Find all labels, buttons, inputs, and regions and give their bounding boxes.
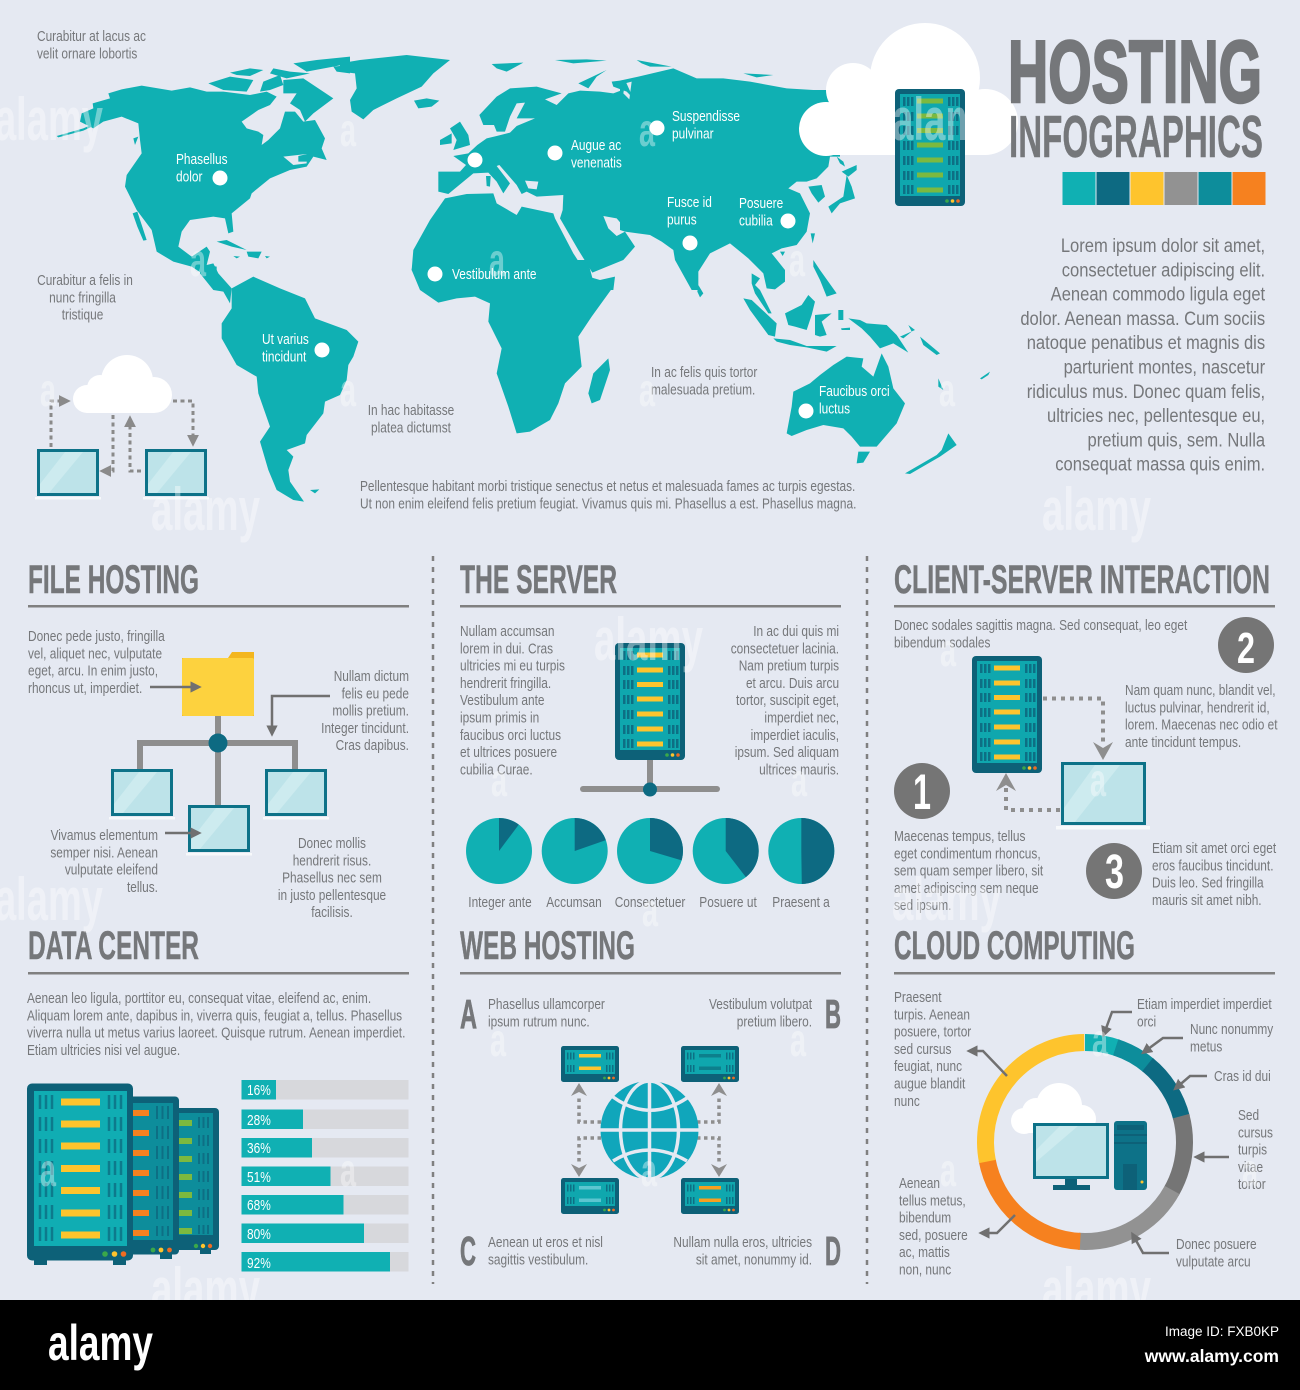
text: step 3: Duis leo. Sed fringilla: [1152, 874, 1264, 891]
text: lower right note: hendrerit risus.: [293, 852, 371, 869]
intro paragraph: parturient montes, nascetur: [1064, 356, 1265, 378]
panel: file hosting: [28, 558, 409, 920]
intro paragraph: pretium quis, sem. Nulla: [1088, 429, 1266, 451]
watermarks: alamy: [1042, 476, 1151, 543]
watermarks: alamy: [151, 1256, 260, 1323]
icon: monitor: [1034, 1124, 1108, 1190]
watermarks: a: [791, 754, 807, 806]
text: server right: ultrices mauris.: [759, 761, 839, 778]
donut chart: [986, 1042, 1184, 1242]
text: top left note: velit ornare lobortis: [37, 45, 138, 62]
watermarks: alamy: [151, 476, 260, 543]
text: lower left note: vulputate eleifend: [65, 861, 158, 878]
text: right note: Nullam dictum: [334, 668, 409, 684]
pie labels: Accumsan: [546, 894, 602, 910]
text: server left: hendrerit fringilla.: [460, 675, 551, 691]
text: step 1: sed ipsum.: [894, 897, 951, 913]
text: map caption: Pellentesque habitant morbi tristique senectus et netus et malesuada fames ac turpis egestas.: [360, 478, 855, 494]
footer logo: alamy: [48, 1315, 153, 1371]
text: data center paragraph: viverra nulla ut metus varius laoreet. Quisque rutrum. Aenean imperdiet.: [27, 1024, 405, 1041]
text: indian ocean note: In ac felis quis tortor: [651, 364, 757, 380]
watermarks: a: [1242, 1144, 1258, 1196]
callout arrows: [970, 1012, 1229, 1253]
text: lower left note: tellus.: [127, 879, 158, 895]
text: step 2: luctus pulvinar, hendrerit id,: [1125, 699, 1270, 716]
callout labels: orci: [1137, 1013, 1156, 1030]
bar chart: 92%: [247, 1255, 271, 1271]
callout labels: [894, 989, 1274, 1278]
text: atlantic note: In hac habitasse: [368, 402, 454, 418]
text: server right: imperdiet iaculis,: [751, 727, 839, 743]
icon: front server rack: [27, 1084, 133, 1265]
icon: small servers: [561, 1046, 739, 1214]
text: server left: Vestibulum ante: [460, 692, 545, 708]
bar chart: [242, 1080, 408, 1272]
text: step 2: ante tincidunt tempus.: [1125, 734, 1241, 750]
text: indian ocean note: malesuada pretium.: [651, 381, 755, 398]
pie labels: Integer ante: [468, 894, 532, 910]
text: left note: Curabitur a felis in: [37, 272, 133, 288]
heading: FILE HOSTING: [28, 558, 199, 602]
text: server left: et ultrices posuere: [460, 744, 557, 760]
icon: middle server rack: [120, 1096, 179, 1259]
heading: WEB HOSTING: [460, 924, 635, 968]
text: lower right note: facilisis.: [311, 904, 353, 920]
text: step 2: lorem. Maecenas nec odio et: [1125, 716, 1278, 733]
callout labels: augue blandit: [894, 1075, 966, 1092]
callout labels: non, nunc: [899, 1261, 952, 1278]
world map: [57, 55, 990, 502]
text: step 3: mauris sit amet nibh.: [1152, 892, 1262, 908]
callout labels: nunc: [894, 1093, 920, 1109]
callout labels: metus: [1190, 1038, 1223, 1055]
text: step 1: Maecenas tempus, tellus: [894, 828, 1026, 844]
text: right note: Integer tincidunt.: [321, 720, 409, 736]
map location markers: [212, 120, 814, 418]
panel: the server: [460, 558, 839, 910]
text: data center paragraph: Aliquam lorem ante, dapibus in, viverra quis, feugiat a, tellus. Phasellus: [27, 1007, 402, 1024]
watermarks: a: [642, 884, 658, 936]
icon: computer tower: [1114, 1121, 1147, 1190]
callout labels: cursus: [1238, 1124, 1273, 1141]
text: server left: lorem in dui. Cras: [460, 640, 553, 657]
callout labels: Aenean: [899, 1175, 940, 1191]
watermarks: a: [940, 624, 956, 676]
badge: 2: 2: [1237, 624, 1255, 673]
intro paragraph: ridiculus mus. Donec quam felis,: [1027, 381, 1265, 402]
callout labels: Cras id dui: [1214, 1068, 1271, 1084]
text: D: sit amet, nonummy id.: [696, 1251, 812, 1268]
icon: laptop: [1056, 764, 1150, 830]
map labels: Vestibulum ante: [452, 266, 537, 282]
callout labels: Donec posuere: [1176, 1236, 1257, 1252]
letters: A: [460, 991, 477, 1037]
watermarks: a: [490, 1014, 506, 1066]
bar chart: 16%: [247, 1082, 271, 1098]
arrows: [150, 687, 330, 833]
pie labels: Praesent a: [772, 894, 830, 910]
icon: large cloud with server: [799, 23, 1018, 206]
icon: network node: [208, 734, 228, 752]
bar chart: 68%: [247, 1197, 271, 1213]
watermarks: a: [939, 364, 955, 416]
text: server left: ipsum primis in: [460, 709, 539, 726]
text: step 1: eget condimentum rhoncus,: [894, 845, 1041, 862]
footer image id: Image ID: FXB0KP: [1165, 1324, 1279, 1339]
panel: web hosting: [460, 924, 841, 1274]
map labels: Ut varius: [262, 331, 309, 347]
watermarks: a: [940, 1144, 956, 1196]
intro paragraph: Aenean commodo ligula eget: [1051, 283, 1265, 305]
bar chart: 51%: [247, 1169, 271, 1185]
dotted arrows: [996, 698, 1113, 810]
watermarks: a: [340, 104, 356, 156]
text: server left: faucibus orci luctus: [460, 727, 561, 743]
map labels: tincidunt: [262, 348, 307, 365]
heading: THE SERVER: [460, 558, 617, 602]
text: server left: Nullam accumsan: [460, 623, 554, 639]
text: lower right note: Donec mollis: [298, 835, 366, 851]
watermarks: alamy: [594, 606, 703, 673]
intro paragraph: ultricies nec, pellentesque eu,: [1047, 405, 1265, 426]
intro paragraph: natoque penatibus et magnis dis: [1027, 332, 1265, 354]
map labels: Posuere: [739, 195, 783, 211]
dotted arrows: [571, 1083, 727, 1177]
map labels: pulvinar: [672, 125, 714, 142]
badge: 1: [894, 763, 950, 820]
watermarks: a: [789, 234, 805, 286]
footer url: www.alamy.com: [1144, 1346, 1279, 1366]
watermarks: a: [1090, 754, 1106, 806]
watermarks: a: [790, 1014, 806, 1066]
text: map caption: Ut non enim eleifend felis pretium feugiat. Vivamus quis mi. Phasellus a est. Phasellus magna.: [360, 495, 856, 512]
text: C: Aenean ut eros et nisl: [488, 1234, 603, 1250]
panel: cloud computing: [894, 924, 1274, 1278]
intro paragraph: dolor. Aenean massa. Cum sociis: [1020, 308, 1265, 329]
text: file hosting intro: Donec pede justo, fringilla: [28, 628, 165, 644]
badge: 3: [1086, 843, 1142, 899]
icon: folder: [182, 652, 254, 716]
text: server right: imperdiet nec,: [764, 709, 839, 726]
bar chart: 36%: [247, 1140, 271, 1156]
text: step 3: eros faucibus tincidunt.: [1152, 857, 1274, 874]
watermarks: a: [340, 364, 356, 416]
badge: 3: 3: [1105, 846, 1124, 899]
text: server right: et arcu. Duis arcu: [746, 675, 839, 691]
text: B: pretium libero.: [737, 1013, 812, 1030]
text: right note: mollis pretium.: [332, 702, 409, 719]
text: lower right note: in justo pellentesque: [278, 887, 386, 903]
text: lower left note: semper nisi. Aenean: [50, 844, 158, 861]
footer bar: [0, 1300, 1300, 1390]
text: B: Vestibulum volutpat: [709, 996, 812, 1012]
map labels: Suspendisse: [672, 108, 740, 124]
watermarks: a: [639, 364, 655, 416]
callout labels: turpis: [1238, 1141, 1267, 1158]
text: atlantic note: platea dictumst: [371, 419, 451, 436]
text: A: ipsum rutrum nunc.: [488, 1013, 590, 1030]
icon: server: [972, 656, 1042, 773]
map labels: venenatis: [571, 154, 622, 171]
text: step 2: Nam quam nunc, blandit vel,: [1125, 682, 1276, 698]
watermarks: a: [641, 1144, 657, 1196]
text: step 3: Etiam sit amet orci eget: [1152, 840, 1276, 856]
letters: B: [825, 991, 841, 1037]
text: right note: felis eu pede: [342, 685, 409, 702]
text: left note: nunc fringilla: [49, 289, 116, 306]
text: server right: consectetuer lacinia.: [731, 640, 839, 657]
heading: DATA CENTER: [28, 924, 199, 968]
text: server left: cubilia Curae.: [460, 761, 533, 778]
text: file hosting intro: rhoncus ut, imperdiet.: [28, 680, 142, 696]
watermarks: a: [340, 1144, 356, 1196]
callout labels: vitae: [1238, 1159, 1263, 1175]
callout labels: ac, mattis: [899, 1244, 950, 1260]
text: C: sagittis vestibulum.: [488, 1251, 588, 1268]
pie labels: [468, 894, 830, 910]
text: D: Nullam nulla eros, ultricies: [673, 1234, 812, 1250]
callout labels: posuere, tortor: [894, 1023, 972, 1040]
title: [1008, 22, 1263, 170]
map labels: Faucibus orci: [819, 383, 890, 399]
text: data center paragraph: Aenean leo ligula, porttitor eu, consequat vitae, eleifend ac, enim.: [27, 990, 371, 1006]
pie labels: Posuere ut: [699, 894, 757, 910]
intro paragraph: consectetuer adipiscing elit.: [1062, 259, 1265, 281]
callout labels: tellus metus,: [899, 1192, 966, 1209]
text: step 1: amet adipiscing sem neque: [894, 880, 1039, 896]
map labels: luctus: [819, 400, 850, 417]
callout labels: tortor: [1238, 1176, 1266, 1192]
diagram: network tree: [140, 716, 295, 806]
watermarks: a: [40, 364, 56, 416]
icon: globe: [600, 1081, 699, 1179]
watermarks: alamy: [892, 86, 1001, 153]
pie labels: Consectetuer: [615, 894, 686, 910]
map labels: Fusce id: [667, 194, 712, 210]
badge: 1: 1: [913, 764, 931, 820]
intro paragraph: Lorem ipsum dolor sit amet,: [1061, 235, 1265, 256]
text: file hosting intro: eget, arcu. In enim justo,: [28, 662, 158, 679]
callout labels: Etiam imperdiet imperdiet: [1137, 996, 1272, 1012]
watermarks: a: [491, 754, 507, 806]
bar chart: 80%: [247, 1226, 271, 1242]
text: lower right note: Phasellus nec sem: [282, 869, 382, 886]
panel: data center: [27, 924, 409, 1272]
watermarks: a: [40, 1144, 56, 1196]
text: step 1: sem quam semper libero, sit: [894, 862, 1044, 879]
map labels: Phasellus: [176, 151, 228, 167]
icons: laptops: [109, 770, 329, 856]
callout labels: Sed: [1238, 1107, 1259, 1123]
text: top left note: Curabitur at lacus ac: [37, 28, 146, 44]
bar chart: 28%: [247, 1112, 271, 1128]
watermarks: alamy: [1042, 1256, 1151, 1323]
map labels: purus: [667, 211, 697, 228]
map labels: dolor: [176, 168, 203, 185]
intro paragraph: consequat massa quis enim.: [1055, 453, 1265, 475]
map labels: Augue ac: [571, 137, 621, 153]
watermarks: alamy: [892, 866, 1001, 933]
watermarks: a: [639, 104, 655, 156]
text: server right: ipsum. Sed aliquam: [735, 744, 839, 760]
watermarks: alamy: [0, 86, 103, 153]
text: A: Phasellus ullamcorper: [488, 996, 605, 1012]
text: client intro: bibendum sodales: [894, 634, 991, 651]
letters: C: [460, 1228, 476, 1274]
map labels: cubilia: [739, 212, 773, 229]
text: right note: Cras dapibus.: [336, 737, 409, 753]
heading: CLOUD COMPUTING: [894, 924, 1135, 968]
text: lower left note: Vivamus elementum: [51, 827, 158, 843]
text: server right: In ac dui quis mi: [753, 623, 839, 639]
callout labels: sed cursus: [894, 1041, 952, 1057]
callout labels: turpis. Aenean: [894, 1006, 970, 1023]
colour swatches: [1062, 172, 1266, 205]
callout labels: Praesent: [894, 989, 942, 1005]
letters: D: [825, 1228, 841, 1274]
callout labels: feugiat, nunc: [894, 1058, 962, 1074]
watermarks: alamy: [0, 866, 103, 933]
callout labels: sed, posuere: [899, 1227, 968, 1243]
map labels: [176, 108, 890, 417]
icon: cloud: [1011, 1083, 1096, 1134]
badge: 2: [1218, 617, 1274, 673]
panel: client-server interaction: [894, 558, 1278, 913]
letters: [460, 991, 841, 1274]
pie charts: [466, 818, 834, 884]
watermarks: a: [489, 234, 505, 286]
text: server right: Nam pretium turpis: [739, 657, 839, 674]
watermarks: a: [1092, 1014, 1108, 1066]
icon: back server rack: [165, 1108, 219, 1254]
callout labels: vulputate arcu: [1176, 1253, 1251, 1270]
watermarks: a: [190, 234, 206, 286]
text: data center paragraph: Etiam ultricies nisi vel augue.: [27, 1042, 180, 1058]
callout labels: Nunc nonummy: [1190, 1021, 1274, 1037]
callout labels: bibendum: [899, 1209, 951, 1226]
icon: cloud network with two laptops: [35, 355, 209, 500]
text: left note: tristique: [62, 306, 103, 323]
text: file hosting intro: vel, aliquet nec, vulputate: [28, 645, 162, 662]
text: client intro: Donec sodales sagittis magna. Sed consequat, leo eget: [894, 617, 1188, 633]
text: server left: ultricies mi eu turpis: [460, 657, 565, 674]
icon: server on network: [580, 643, 720, 796]
text: server right: tortor, suscipit eget,: [736, 692, 839, 708]
